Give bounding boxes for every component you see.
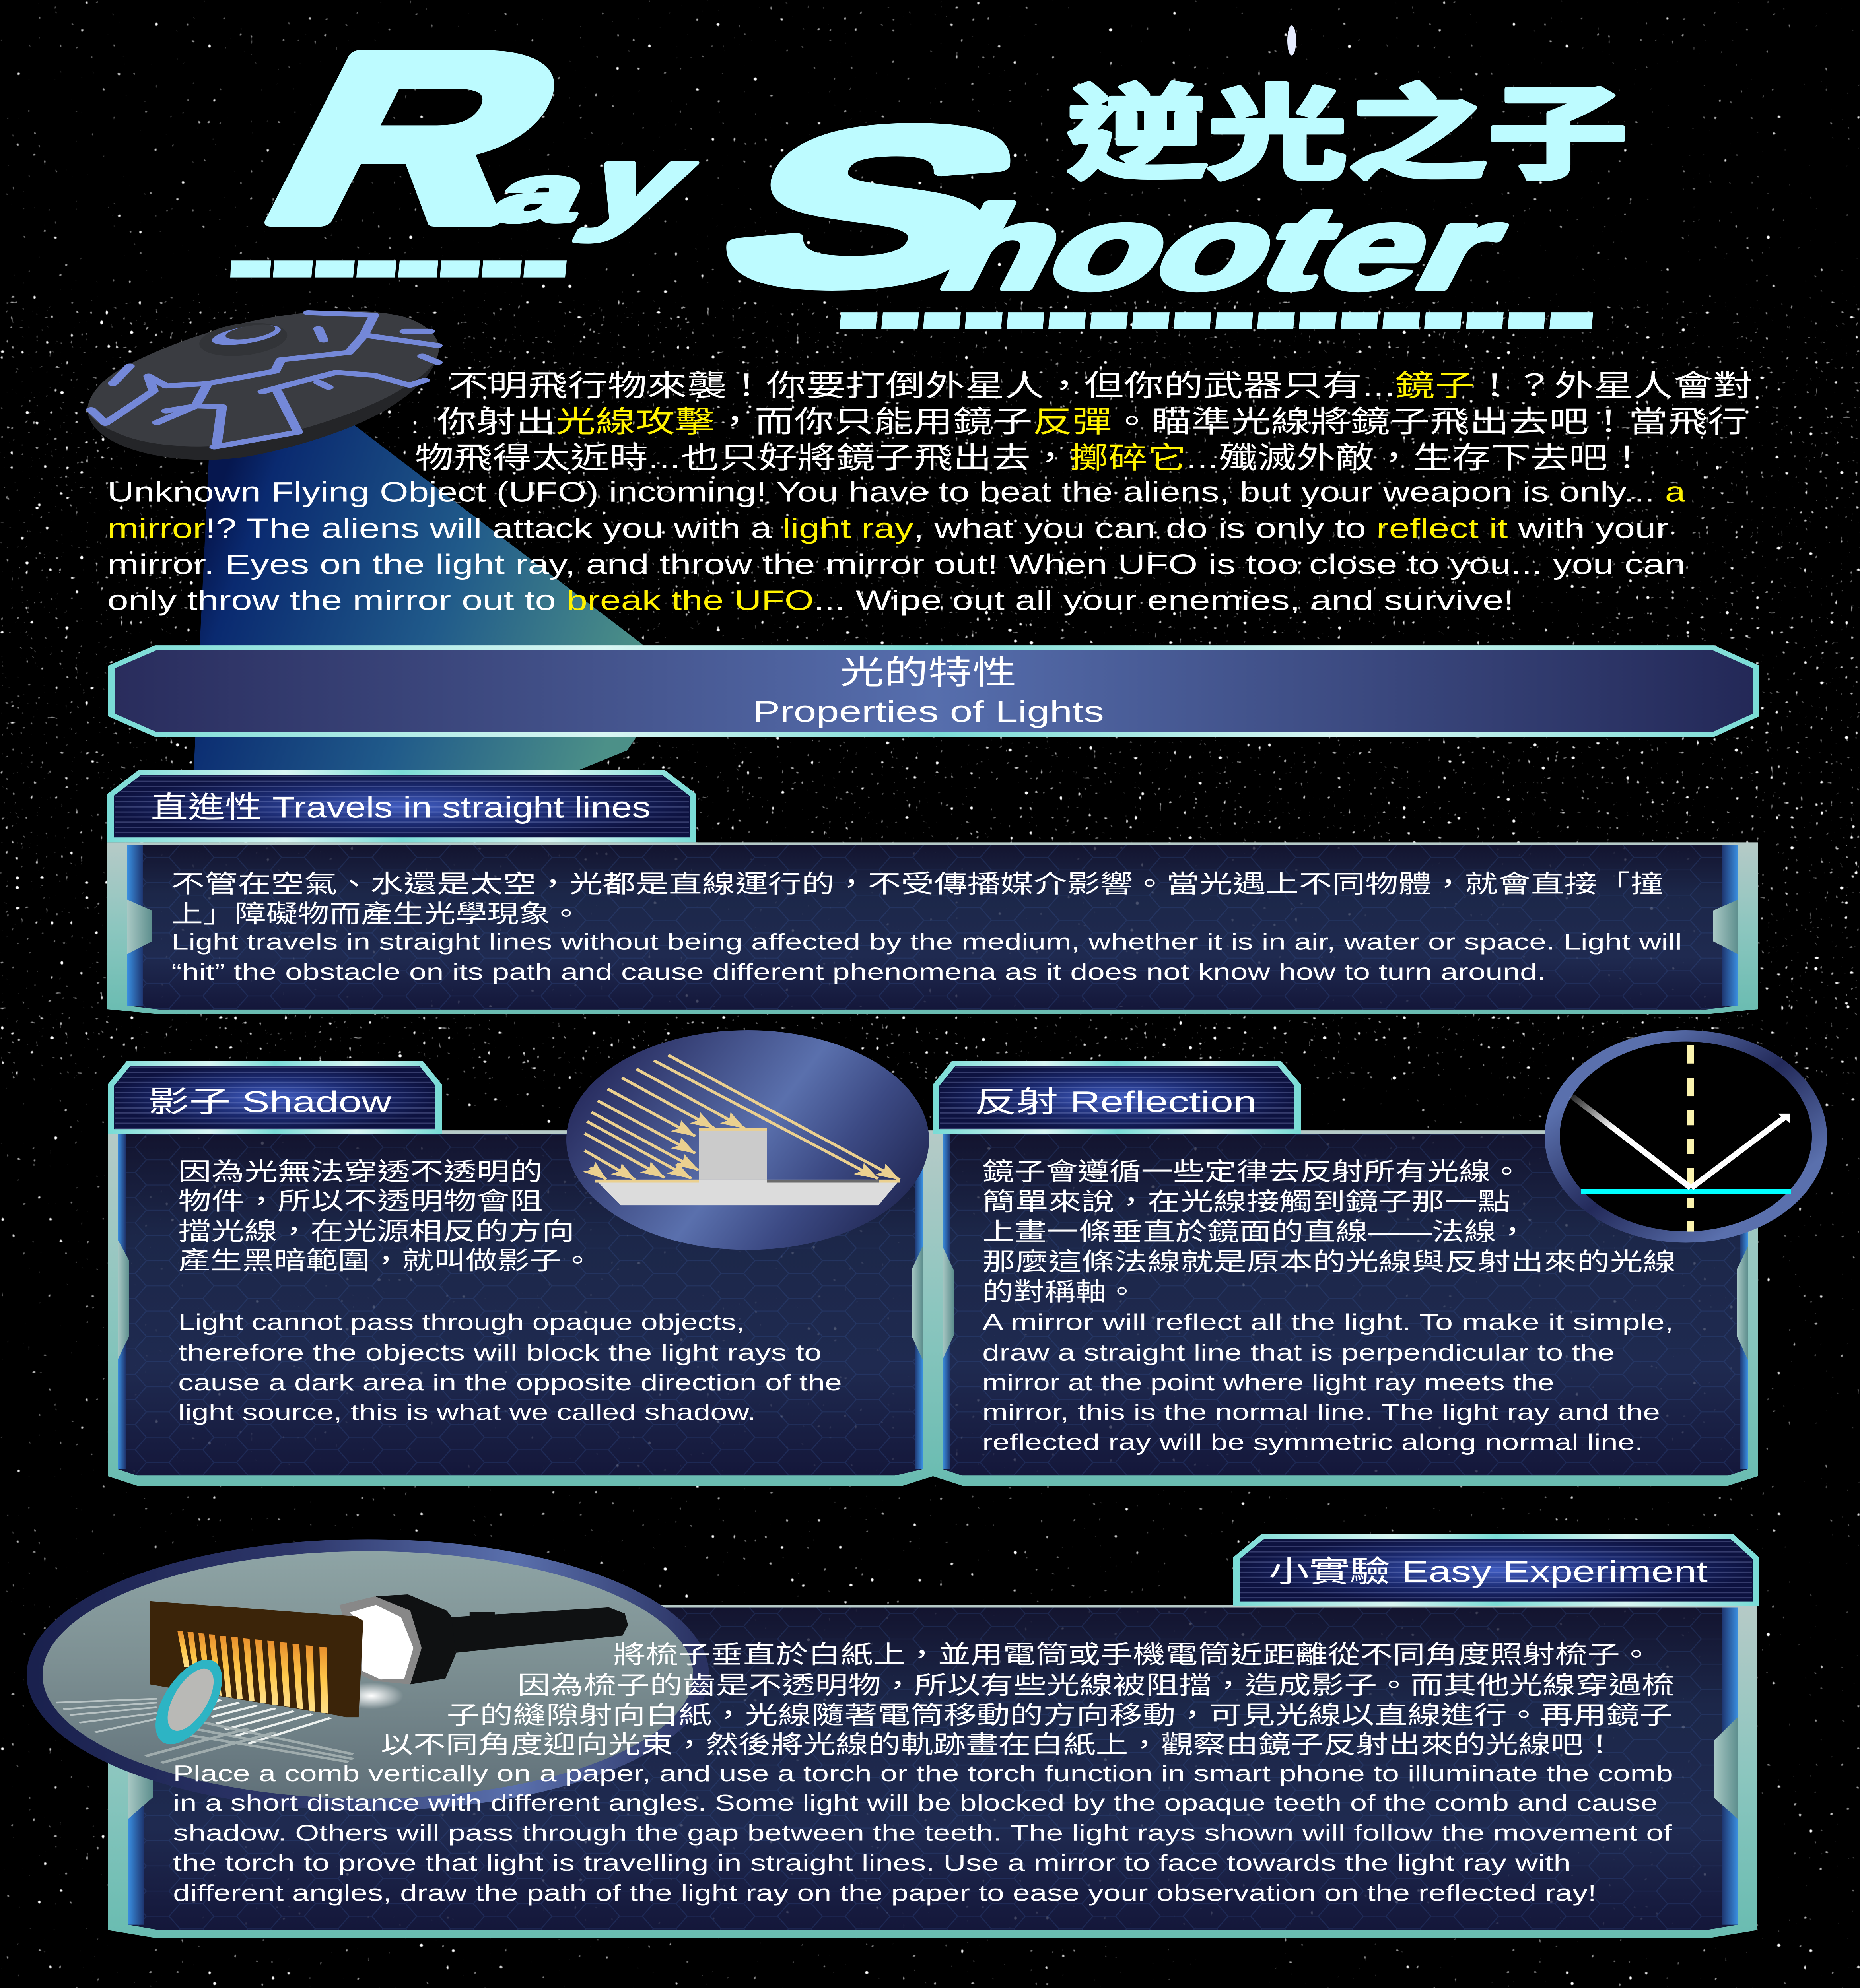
panel 2 text: 產生黑暗範圍，就叫做影子。 bbox=[178, 1246, 593, 1275]
panel 3 text: 的對稱軸。 bbox=[982, 1277, 1137, 1306]
panel 3 text: A mirror will reflect all the light. To make it simple, bbox=[982, 1310, 1673, 1335]
section banner: Properties of Lights bbox=[111, 648, 1756, 734]
comb teeth gaps bbox=[177, 1631, 328, 1714]
panel 3 text: 上畫一條垂直於鏡面的直線——法線， bbox=[982, 1217, 1528, 1246]
title letter a: a bbox=[478, 148, 607, 237]
panel: travels in straight lines bbox=[107, 772, 1758, 1014]
panel 4 tab bbox=[1236, 1537, 1756, 1604]
panel 2 text: 擋光線，在光源相反的方向 bbox=[178, 1217, 575, 1245]
panel 3 text: 簡單來說，在光線接觸到鏡子那一點 bbox=[982, 1188, 1510, 1216]
panel 1 text: “hit” the obstacle on its path and cause different phenomena as it does not know how to turn around. bbox=[171, 959, 1546, 985]
title letter S: S bbox=[683, 82, 1063, 330]
torch bezel bbox=[340, 1596, 422, 1684]
torch body bbox=[449, 1607, 628, 1653]
UFO blue cracks bbox=[91, 313, 437, 447]
panel 1 body bbox=[127, 845, 1738, 1010]
circle ring and black interior bbox=[1552, 1036, 1819, 1237]
panel 3 tab bbox=[936, 1064, 1298, 1132]
banner heading English: Properties of Lights bbox=[753, 695, 1104, 728]
title letter y: y bbox=[567, 124, 717, 242]
experiment text English: the torch to prove that light is travelling in straight lines. Use a mirror to face towards the light ray with bbox=[173, 1850, 1571, 1876]
panel 1 text: 不管在空氣、水還是太空，光都是直線運行的，不受傳播媒介影響。當光遇上不同物體，就會直接「撞 bbox=[171, 870, 1664, 898]
panel 4 text bbox=[173, 1640, 1675, 1906]
experiment text English: different angles, draw the path of the light ray on the paper to ease your observation on the reflected ray! bbox=[173, 1880, 1596, 1906]
torch head bbox=[376, 1594, 456, 1684]
panel 2 text: cause a dark area in the opposite direction of the bbox=[178, 1370, 842, 1396]
panel 4 heading: 小實驗 Easy Experiment bbox=[1269, 1555, 1708, 1588]
experiment text English: Place a comb vertically on a paper, and use a torch or the torch function in smart phone to illuminate the comb bbox=[173, 1761, 1673, 1786]
panel: shadow bbox=[108, 1064, 933, 1486]
English introduction: mirror!? The aliens will attack you with a light ray, what you can do is only to reflect it with your bbox=[107, 513, 1668, 544]
banner heading Chinese: 光的特性 bbox=[840, 654, 1016, 691]
underline under Shooter bbox=[840, 312, 1593, 329]
title: Ray Shooter bbox=[225, 4, 1593, 330]
panel 3 text: 那麼這條法線就是原本的光線與反射出來的光線 bbox=[982, 1248, 1676, 1276]
experiment text English bbox=[173, 1761, 1673, 1906]
mirror base block bbox=[595, 1180, 900, 1205]
normal line bbox=[1687, 1045, 1694, 1232]
panel 2 text bbox=[178, 1157, 842, 1425]
panel 2 body bbox=[118, 1134, 923, 1475]
illustration: comb and torch experiment bbox=[35, 1545, 701, 1805]
Chinese introduction bbox=[415, 369, 1753, 475]
light beam from UFO bbox=[194, 416, 668, 771]
lit and shadow strips bbox=[595, 1128, 900, 1182]
panel 3 text: draw a straight line that is perpendicular to the bbox=[982, 1340, 1615, 1365]
mirror line bbox=[1581, 1189, 1791, 1194]
panel 1 heading: 直進性 Travels in straight lines bbox=[151, 790, 651, 824]
panel 3 text: 鏡子會遵循一些定律去反射所有光線。 bbox=[982, 1157, 1522, 1186]
panel 2 text: light source, this is what we called shadow. bbox=[178, 1400, 756, 1425]
panel 4 body bbox=[128, 1607, 1738, 1930]
upright opaque block bbox=[699, 1128, 767, 1180]
panel 3 text: mirror at the point where light ray meets the bbox=[982, 1370, 1554, 1396]
panel 2 heading: 影子 Shadow bbox=[148, 1085, 392, 1118]
panel 1 text: 上」障礙物而產生光學現象。 bbox=[171, 900, 582, 928]
disc background bbox=[566, 1030, 929, 1250]
English introduction: only throw the mirror out to break the UFO... Wipe out all your enemies, and survive! bbox=[107, 585, 1514, 616]
experiment text Chinese: 因為梳子的齒是不透明物，所以有些光線被阻擋，造成影子。而其他光線穿過梳 bbox=[517, 1671, 1675, 1699]
UFO upper saucer bbox=[87, 311, 439, 447]
English introduction: Unknown Flying Object (UFO) incoming! You have to beat the aliens, but your weapon is only... a bbox=[107, 476, 1685, 508]
English introduction: mirror. Eyes on the light ray, and throw the mirror out! When UFO is too close to you... you can bbox=[107, 549, 1685, 580]
floor light stripes bbox=[56, 1699, 157, 1732]
panel 2 tab bbox=[111, 1064, 439, 1132]
reflected ray with arrow bbox=[1691, 1114, 1790, 1188]
panel 3 heading: 反射 Reflection bbox=[974, 1085, 1257, 1118]
panel 1 text: Light travels in straight lines without being affected by the medium, whether it is in air, water or space. Light will bbox=[171, 930, 1682, 955]
panel 3 frame bbox=[933, 1130, 1758, 1486]
panel 2 text: therefore the objects will block the light rays to bbox=[178, 1340, 822, 1365]
panel 3 text bbox=[982, 1157, 1676, 1455]
light flare bbox=[340, 1683, 403, 1709]
experiment text English: shadow. Others will pass through the gap between the teeth. The light rays shown will follow the movement of bbox=[173, 1820, 1672, 1846]
title letter R: R bbox=[225, 4, 610, 272]
hand mirror bbox=[142, 1658, 235, 1747]
experiment text English: in a short distance with different angles. Some light will be blocked by the opaque teeth of the comb and cause bbox=[173, 1790, 1658, 1816]
panel 3 text: reflected ray will be symmetric along normal line. bbox=[982, 1430, 1643, 1455]
experiment text Chinese bbox=[381, 1640, 1675, 1759]
English introduction bbox=[107, 476, 1685, 616]
incident ray bbox=[1572, 1096, 1691, 1188]
experiment text Chinese: 子的縫隙射向白紙，光線隨著電筒移動的方向移動，可見光線以直線進行。再用鏡子 bbox=[447, 1701, 1673, 1729]
panel 3 body bbox=[943, 1134, 1748, 1475]
panel 2 text: Light cannot pass through opaque objects, bbox=[178, 1310, 744, 1335]
underline under Ray bbox=[230, 260, 567, 278]
panel 3 text: mirror, this is the normal line. The light ray and the bbox=[982, 1400, 1660, 1425]
torch lens bbox=[350, 1605, 414, 1679]
panel 4 frame bbox=[108, 1605, 1757, 1938]
panel 2 frame bbox=[108, 1130, 933, 1486]
diagram: shadow disc bbox=[566, 1030, 929, 1250]
panel 2 text: 因為光無法穿透不透明的 bbox=[178, 1157, 543, 1186]
panel 1 text bbox=[171, 870, 1682, 985]
icon: UFO bbox=[87, 311, 439, 460]
intro text bbox=[107, 369, 1753, 616]
title word hooter: hooter bbox=[920, 182, 1529, 313]
panel 1 frame bbox=[107, 842, 1758, 1014]
panel 2 text: 物件，所以不透明物會阻 bbox=[178, 1187, 543, 1215]
comb bbox=[150, 1601, 363, 1717]
UFO lower rim bbox=[87, 311, 439, 460]
panel: reflection bbox=[933, 1064, 1758, 1486]
panel: easy experiment bbox=[108, 1537, 1757, 1938]
Chinese introduction: 不明飛行物來襲！你要打倒外星人，但你的武器只有...鏡子！？外星人會對 bbox=[449, 369, 1753, 402]
title: Chinese 逆光之子: 逆光之子 bbox=[1067, 78, 1628, 192]
diagram: reflection circle bbox=[1552, 1036, 1819, 1237]
Chinese introduction: 物飛得太近時...也只好將鏡子飛出去，擲碎它...殲滅外敵，生存下去吧！ bbox=[415, 441, 1646, 475]
UFO central hub bbox=[189, 317, 297, 362]
experiment text Chinese: 將梳子垂直於白紙上，並用電筒或手機電筒近距離從不同角度照射梳子。 bbox=[613, 1640, 1652, 1669]
illustration disc bbox=[35, 1545, 701, 1805]
Chinese introduction: 你射出光線攻擊，而你只能用鏡子反彈。瞄準光線將鏡子飛出去吧！當飛行 bbox=[437, 405, 1747, 439]
experiment text Chinese: 以不同角度迎向光束，然後將光線的軌跡畫在白紙上，觀察由鏡子反射出來的光線吧！ bbox=[381, 1731, 1616, 1759]
panel 1 tab bbox=[111, 772, 693, 840]
light ray arrows bbox=[585, 1055, 900, 1180]
